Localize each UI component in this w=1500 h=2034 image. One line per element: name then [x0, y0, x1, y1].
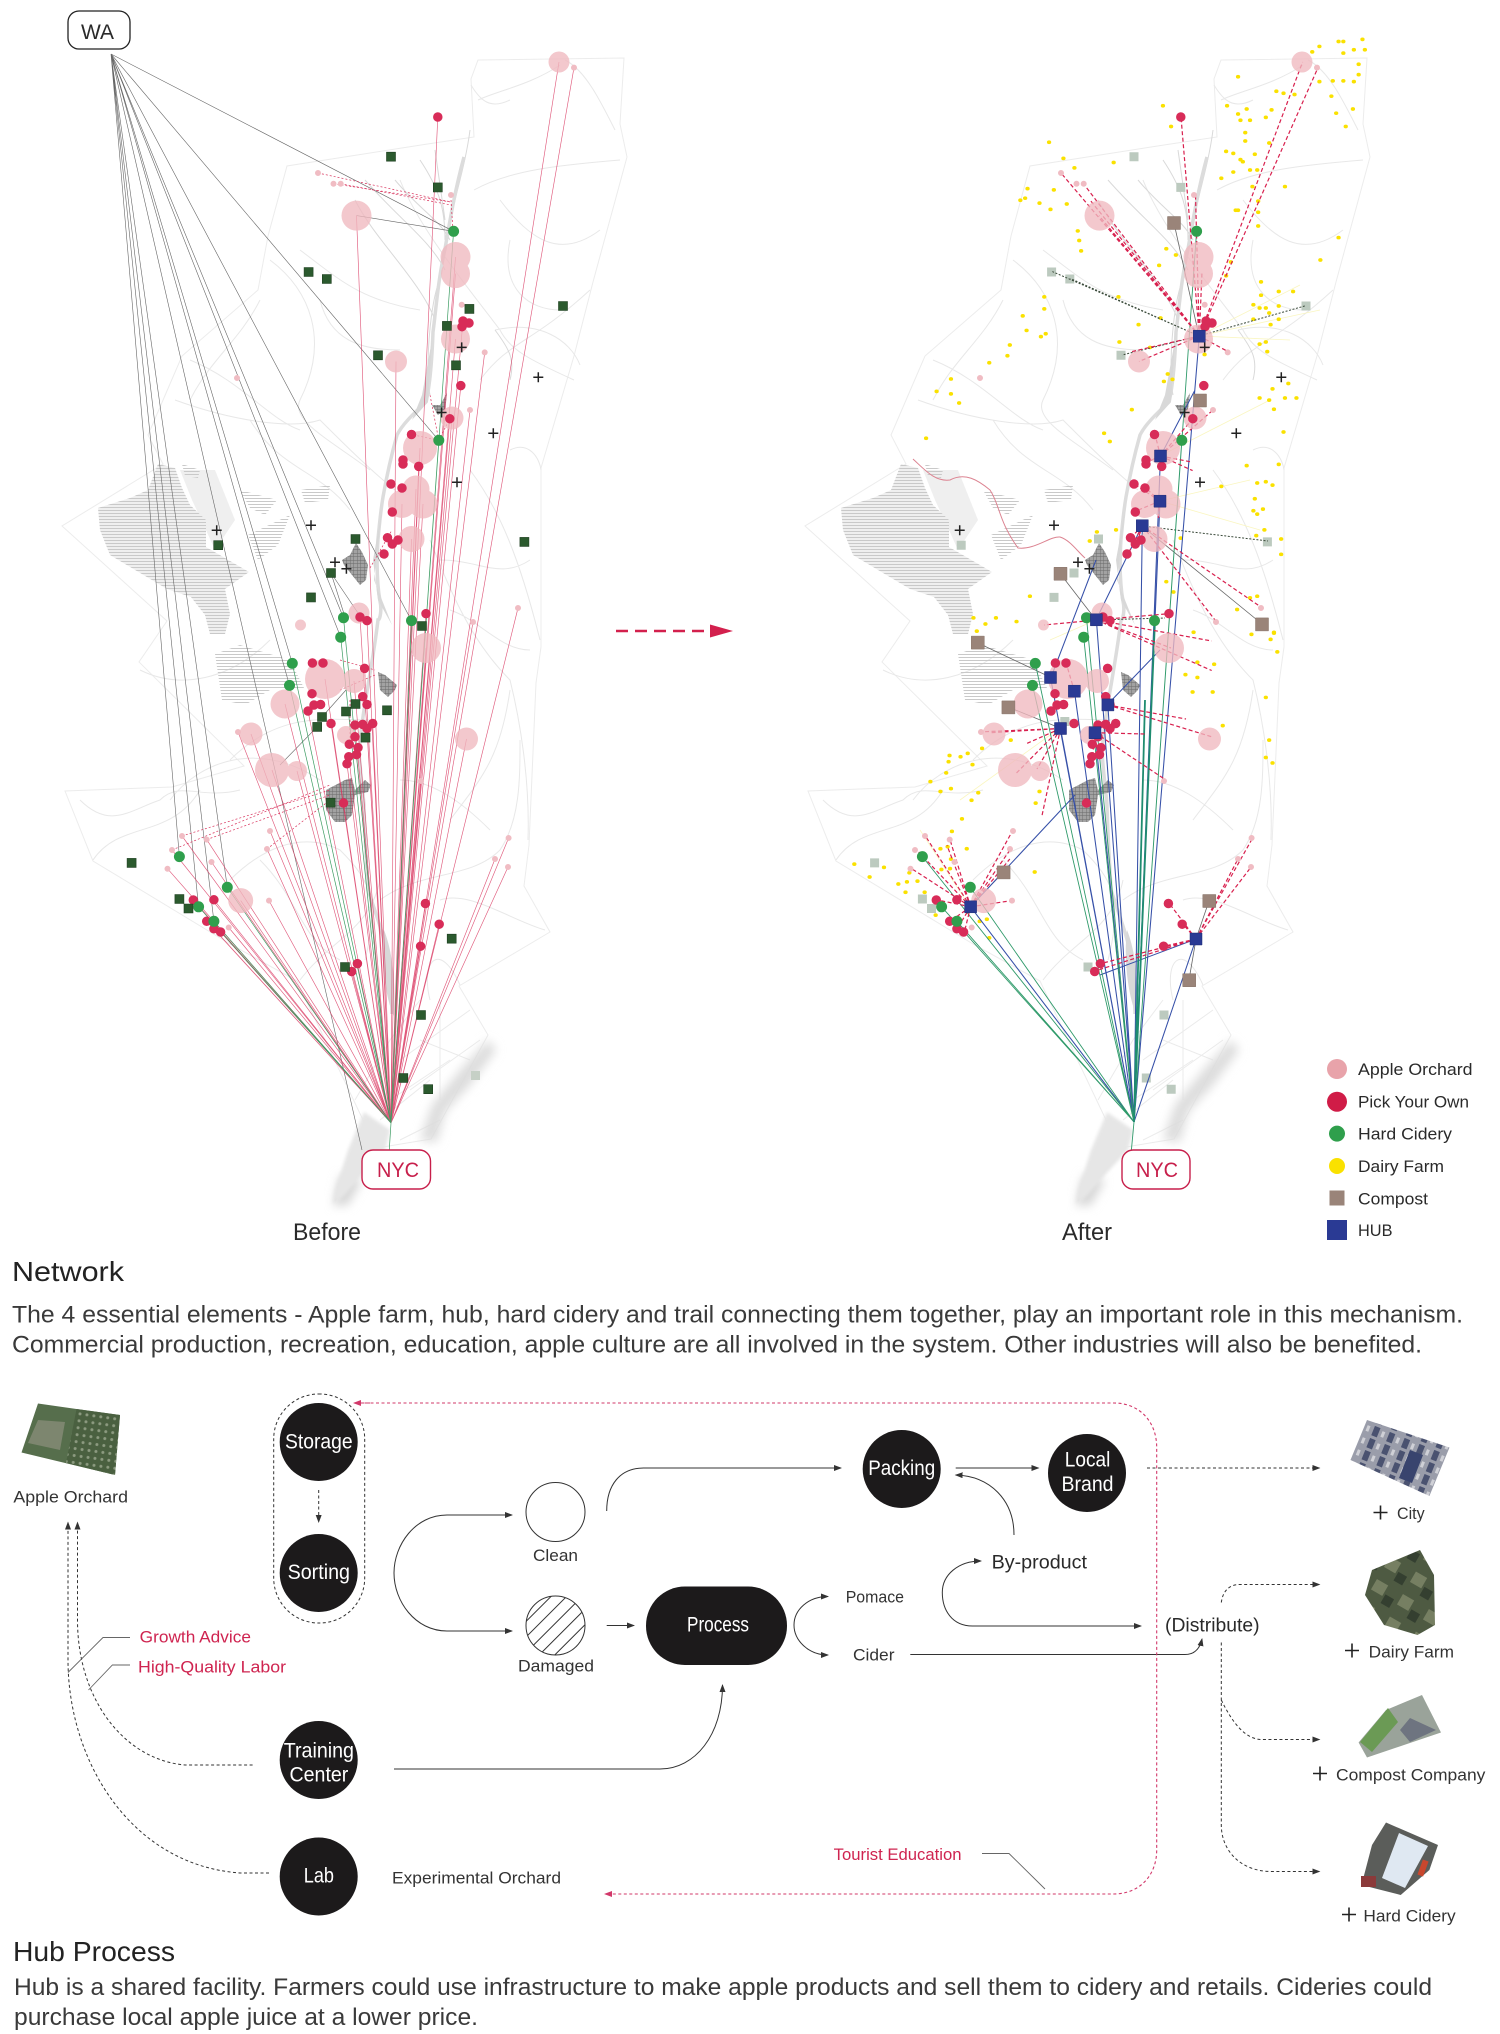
node: local brand: Brand	[1062, 1473, 1114, 1496]
base map before	[62, 58, 627, 1206]
transition arrow	[616, 624, 733, 638]
node: sorting: Sorting	[288, 1561, 350, 1584]
Catskill trail	[913, 459, 1085, 558]
arrow: by-product to packing	[956, 1475, 1014, 1535]
arrow: packing to local brand	[956, 1467, 1038, 1469]
arrow: storage to sorting	[318, 1490, 320, 1522]
text block: hub description	[14, 1974, 1432, 2031]
label: distribute: (Distribute)	[1165, 1616, 1260, 1636]
node: process: Process	[687, 1614, 749, 1636]
legend: pick your own: Pick Your Own	[1358, 1092, 1469, 1112]
label: high-quality labor: High-Quality Labor	[138, 1658, 287, 1676]
dashed arrow: training to orchard	[78, 1522, 253, 1765]
text block: network description: The 4 essential elements - Apple farm, hub, hard cidery and trail connecting them together, play an important role in this mechanism.	[12, 1302, 1463, 1328]
legend	[1327, 1059, 1472, 1240]
image: apple orchard aerial	[22, 1404, 120, 1475]
label: growth advice: Growth Advice	[140, 1628, 251, 1646]
node: lab: Lab	[304, 1864, 334, 1888]
farm points	[168, 52, 574, 972]
node: packing: Packing	[868, 1457, 935, 1480]
NYC label before: NYC	[377, 1159, 419, 1182]
label: cider: Cider	[853, 1646, 895, 1664]
yellow service lines	[920, 285, 1320, 907]
label: plus hard cidery: Hard Cidery	[1363, 1908, 1456, 1926]
arrow: damaged to process	[607, 1624, 634, 1626]
dashed arrows: distribute branches	[1221, 1584, 1319, 1872]
NYC label before	[362, 1150, 430, 1189]
storage and sorting enclosure	[274, 1394, 365, 1623]
label: plus city: City	[1397, 1505, 1425, 1523]
hub process diagram	[13, 1394, 1486, 1926]
hub boundary dashed loop	[354, 1403, 1157, 1894]
node: local brand	[1048, 1434, 1126, 1512]
legend: hub: HUB	[1358, 1221, 1392, 1240]
caption: Before: Before	[293, 1219, 361, 1246]
arrow: split to clean and damaged	[394, 1515, 512, 1631]
arrow: cider to distribute	[910, 1639, 1202, 1654]
node: training center: Training	[284, 1740, 354, 1762]
dashed arrow: lab to orchard	[68, 1522, 269, 1873]
dairy farm dots	[926, 39, 1365, 634]
node: sorting	[280, 1534, 358, 1612]
farm points after	[910, 52, 1317, 972]
node: clean: Clean	[533, 1547, 578, 1565]
label: plus compost company: Compost Company	[1336, 1766, 1486, 1784]
hub to farm dashed links	[912, 62, 1318, 971]
compost links	[970, 223, 1262, 980]
arrows: process to pomace and cider	[794, 1596, 828, 1655]
map: after	[805, 39, 1370, 1246]
image: city aerial	[1350, 1420, 1450, 1496]
text block: hub description: Hub is a shared facility. Farmers could use infrastructure to make apple products and sell them to cidery and retails. Cideries could	[14, 1974, 1432, 2001]
hub to dairy dotted links	[1052, 272, 1306, 620]
arrow: training to process	[394, 1685, 722, 1769]
image: hard cidery aerial	[1361, 1822, 1438, 1895]
faded former squares	[870, 152, 1310, 1094]
label: tourist education: Tourist Education	[834, 1846, 962, 1864]
map: before	[62, 11, 627, 1246]
hub links to NYC blue	[971, 336, 1199, 1122]
node: training center	[280, 1721, 358, 1799]
legend: hub	[1327, 1220, 1392, 1240]
local dashed links	[172, 173, 453, 850]
cidery lines to NYC	[199, 231, 454, 1170]
heading: Hub Process: Hub Process	[13, 1936, 175, 1967]
hub squares	[965, 330, 1205, 945]
NYC label after: NYC	[1136, 1159, 1178, 1182]
legend: apple orchard: Apple Orchard	[1358, 1060, 1472, 1079]
image: dairy farm aerial	[1365, 1550, 1435, 1635]
label: high-quality labor	[88, 1658, 287, 1690]
node: damaged	[518, 1596, 594, 1676]
legend: dairy farm: Dairy Farm	[1358, 1157, 1444, 1176]
label: growth advice	[68, 1628, 251, 1672]
supply lines to NYC	[168, 62, 574, 1123]
node: damaged: Damaged	[518, 1658, 594, 1676]
image: compost company aerial	[1359, 1695, 1441, 1758]
dashed arrow: local brand to city	[1147, 1467, 1319, 1469]
WA label	[68, 11, 130, 49]
node: storage: Storage	[285, 1430, 353, 1454]
NYC label after	[1122, 1150, 1190, 1189]
arrow: byproduct loop	[942, 1561, 1141, 1626]
compost squares	[971, 216, 1268, 987]
label: experimental orchard: Experimental Orchard	[392, 1870, 561, 1888]
node: packing	[863, 1430, 941, 1508]
node: clean	[526, 1482, 585, 1565]
dairy farm dots south	[854, 618, 1277, 938]
node: storage	[280, 1403, 358, 1481]
text block: network description: Commercial production, recreation, education, apple culture are all involved in the system. Other industries will also be benefited.	[12, 1332, 1422, 1358]
label: plus dairy farm: Dairy Farm	[1369, 1644, 1454, 1662]
base map after	[805, 58, 1370, 1206]
text block: hub description: purchase local apple juice at a lower price.	[14, 2004, 478, 2031]
node: lab	[280, 1838, 358, 1916]
legend: compost: Compost	[1358, 1190, 1428, 1208]
node: local brand: Local	[1065, 1448, 1110, 1472]
WA label: WA	[81, 21, 114, 44]
heading: Network: Network	[12, 1256, 125, 1287]
legend: hard cidery: Hard Cidery	[1358, 1124, 1453, 1144]
legend: compost	[1330, 1190, 1428, 1208]
label: by-product: By-product	[992, 1552, 1088, 1574]
arrow: clean to packing	[607, 1468, 841, 1511]
label: apple orchard: Apple Orchard	[13, 1488, 128, 1506]
caption: After: After	[1062, 1219, 1112, 1246]
connection lines from WA	[111, 54, 454, 1150]
dairy farm squares	[127, 152, 567, 1094]
label: plus city	[1374, 1505, 1425, 1523]
node: training center: Center	[290, 1764, 348, 1786]
label: pomace: Pomace	[846, 1588, 904, 1606]
node: process	[646, 1586, 787, 1665]
text block: network description	[12, 1302, 1463, 1358]
cidery links to NYC green	[922, 231, 1197, 1165]
label: tourist education	[834, 1846, 1045, 1889]
